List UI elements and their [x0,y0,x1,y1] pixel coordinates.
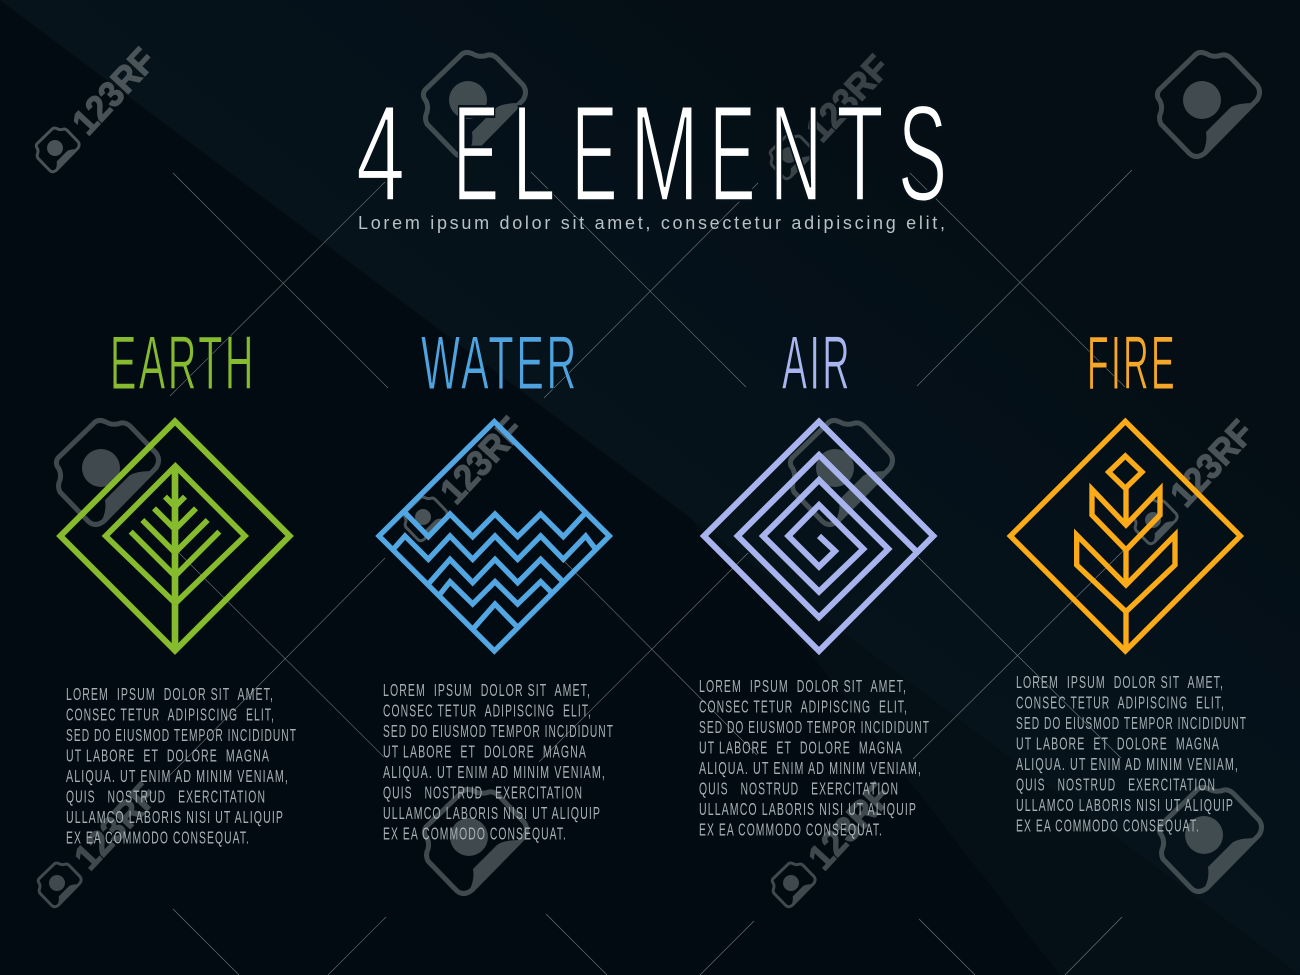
watermark logo bottom left [38,775,165,907]
text block: earth: ULLAMCO LABORIS NISI UT ALIQUIP [66,807,284,827]
title: N [770,78,822,230]
title: E [453,78,499,230]
text block: water [383,680,614,844]
text block: water: UT LABORE ET DOLORE MAGNA [383,742,587,762]
watermark: large camera top right [1157,52,1260,156]
text block: earth: UT LABORE ET DOLORE MAGNA [66,746,270,766]
text block: water: SED DO EIUSMOD TEMPOR INCIDIDUNT [383,721,614,741]
watermark logo fire [1134,412,1261,544]
title: M [630,78,699,230]
watermark logo bottom left: 123RF [66,775,165,877]
text block: air: SED DO EIUSMOD TEMPOR INCIDIDUNT [699,717,930,737]
icon: earth leaf diamond [60,421,290,651]
text block: earth: EX EA COMMODO CONSEQUAT. [66,828,250,848]
heading: water: WATER [421,321,579,406]
text block: earth: LOREM IPSUM DOLOR SIT AMET, [66,684,274,704]
watermark logo top centre: 123RF [798,47,897,149]
title: E [710,78,756,230]
title: 4 [356,78,405,230]
text block: earth: QUIS NOSTRUD EXERCITATION [66,786,266,806]
watermark logo bottom centre: 123RF [800,775,899,877]
text block: water: LOREM IPSUM DOLOR SIT AMET, [383,680,591,700]
title: T [836,78,884,230]
text block: air: UT LABORE ET DOLORE MAGNA [699,738,903,758]
watermark: large camera bottom right [1159,787,1262,892]
text block: air [699,676,930,840]
heading: earth: EARTH [110,321,256,406]
text block: air: ULLAMCO LABORIS NISI UT ALIQUIP [699,799,917,819]
text block: water: ULLAMCO LABORIS NISI UT ALIQUIP [383,803,601,823]
watermark logo fire: 123RF [1162,412,1261,514]
watermark: large camera bottom centre [424,789,526,894]
watermark logo top left [36,40,163,172]
watermark logo top centre [770,47,897,179]
title: L [512,78,556,230]
icon: water waves diamond [379,422,609,651]
watermark logo water: 123RF [432,409,531,511]
watermark: large camera top centre [423,52,526,156]
diamond lattice lines [170,170,1132,975]
text: AIR [782,321,852,406]
watermark: large camera air [790,420,892,524]
text block: earth [66,684,297,848]
text block: air: ALIQUA. UT ENIM AD MINIM VENIAM, [699,758,922,778]
text block: earth: CONSEC TETUR ADIPISCING ELIT, [66,704,275,724]
text block: air: EX EA COMMODO CONSEQUAT. [699,820,883,840]
text block: water: CONSEC TETUR ADIPISCING ELIT, [383,700,592,720]
text block: earth: SED DO EIUSMOD TEMPOR INCIDIDUNT [66,725,297,745]
text block: water: QUIS NOSTRUD EXERCITATION [383,782,583,802]
watermark logo water [404,409,531,541]
icon: air spiral diamond [704,422,933,651]
text block: water: ALIQUA. UT ENIM AD MINIM VENIAM, [383,762,606,782]
icon: fire flame diamond [1010,421,1240,651]
text: FIRE [1087,321,1177,406]
watermark: large camera left [56,420,158,524]
watermark logo bottom centre [772,775,899,907]
text block: water: EX EA COMMODO CONSEQUAT. [383,824,567,844]
text block: fire [1016,672,1247,836]
subtitle: Lorem ipsum dolor sit amet, consectetur adipiscing elit, [358,213,945,233]
title: S [898,78,947,230]
text block: air: CONSEC TETUR ADIPISCING ELIT, [699,696,908,716]
title: E [572,78,618,230]
text block: air: LOREM IPSUM DOLOR SIT AMET, [699,676,907,696]
text block: air: QUIS NOSTRUD EXERCITATION [699,778,899,798]
watermark logo top left: 123RF [64,40,163,142]
text block: earth: ALIQUA. UT ENIM AD MINIM VENIAM, [66,766,289,786]
